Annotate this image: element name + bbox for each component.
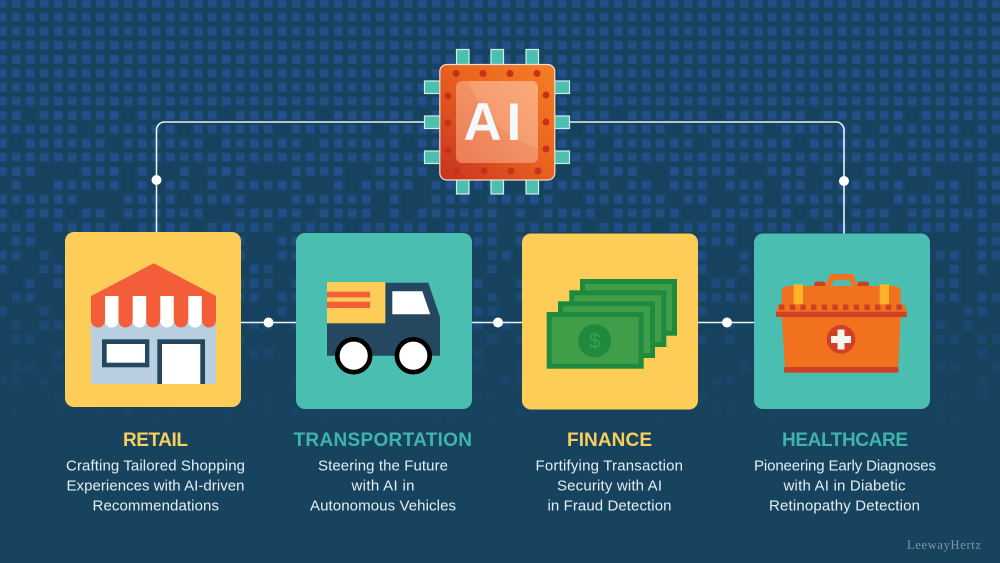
- text: healthcare description: Retinopathy Detection: [769, 498, 920, 514]
- text: finance description: in Fraud Detection: [548, 498, 672, 514]
- icon: truck: [327, 282, 440, 372]
- text: healthcare description: with AI in Diabetic: [782, 478, 906, 494]
- text: finance description: [536, 458, 683, 514]
- panel: retail card: [65, 232, 241, 407]
- text: transportation description: Steering the Future: [318, 458, 448, 474]
- chip label: AI: [464, 93, 521, 152]
- connector dots: [152, 175, 849, 328]
- icon: store: [91, 263, 216, 384]
- text: finance description: Security with AI: [557, 478, 662, 494]
- text: healthcare description: [754, 458, 936, 514]
- text: retail description: Crafting Tailored Shopping: [66, 458, 245, 474]
- text: retail description: [66, 458, 245, 514]
- text: transportation description: Autonomous Vehicles: [310, 498, 456, 514]
- heading: retail: RETAIL: [123, 430, 188, 451]
- panel: finance card: [522, 234, 698, 410]
- heading: transportation: TRANSPORTATION: [294, 430, 472, 451]
- watermark: LeewayHertz: [907, 538, 981, 552]
- text: finance description: Fortifying Transaction: [536, 458, 683, 474]
- icon: money stack: $: [589, 330, 601, 353]
- icon: money stack: [549, 282, 674, 366]
- panel: transportation card: [296, 233, 472, 409]
- text: retail description: Experiences with AI-driven: [66, 478, 244, 494]
- AI chip icon: [424, 50, 570, 194]
- icon: medical kit: [776, 274, 907, 373]
- text: transportation description: [310, 458, 456, 514]
- heading: finance: FINANCE: [567, 430, 652, 451]
- connector lines: [156, 122, 844, 322]
- heading: healthcare: HEALTHCARE: [782, 430, 908, 451]
- text: retail description: Recommendations: [92, 498, 219, 514]
- text: healthcare description: Pioneering Early Diagnoses: [754, 458, 936, 474]
- panel: healthcare card: [754, 234, 930, 409]
- text: transportation description: with AI in: [350, 478, 414, 494]
